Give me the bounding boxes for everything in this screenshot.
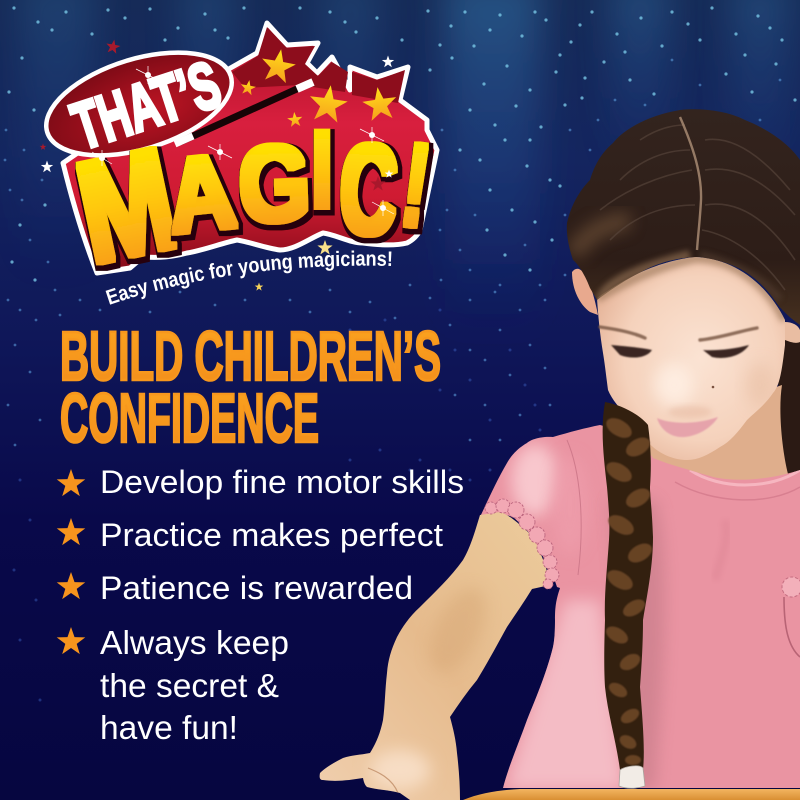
arm and hand — [320, 512, 550, 800]
bullet star 3 — [57, 572, 85, 599]
tagline text: Easy magic for young magicians! — [106, 250, 392, 305]
heading: CONFIDENCE — [60, 379, 319, 457]
neck — [650, 385, 788, 482]
bullet star 4 — [57, 627, 85, 654]
bullet text 4: the secret & — [100, 667, 279, 704]
face — [597, 257, 785, 460]
logo: MAGIC! lettering: G — [237, 123, 312, 246]
shirt — [480, 425, 800, 790]
photo: girl looking down — [320, 109, 800, 800]
bullet text 4 — [100, 624, 289, 746]
nose and cheek shading — [597, 258, 785, 418]
hair parting — [680, 117, 701, 250]
heading — [60, 317, 441, 457]
shirt pocket — [784, 597, 800, 657]
bullet list — [57, 464, 464, 746]
logo: MAGIC! lettering: C — [337, 117, 400, 263]
logo: That's Magic! — [34, 23, 437, 305]
logo: magic wand — [175, 82, 313, 144]
heading: BUILD CHILDREN’S — [60, 317, 441, 395]
eyebrows — [600, 327, 757, 340]
logo: dark red oval — [34, 33, 244, 175]
bullet text 2: Practice makes perfect — [100, 517, 443, 553]
pocket flower — [782, 577, 800, 597]
mole — [712, 386, 714, 388]
logo: MAGIC! lettering: A — [162, 132, 240, 255]
logo: gold stars — [239, 46, 399, 127]
bullet text 3: Patience is rewarded — [100, 570, 413, 606]
left ear — [572, 269, 598, 315]
bullet text 4: have fun! — [100, 709, 238, 746]
eyes — [611, 345, 749, 358]
facial features — [597, 258, 785, 437]
bullet text 1: Develop fine motor skills — [100, 464, 464, 500]
logo: small loose stars — [40, 38, 394, 291]
right ear — [785, 322, 800, 343]
logo: THAT'S lettering: THAT’S — [63, 47, 229, 163]
table edge — [463, 789, 800, 800]
bullet star 2 — [57, 518, 85, 545]
mouth — [657, 417, 718, 437]
left braid — [603, 402, 655, 770]
logo: MAGIC! lettering: I — [312, 108, 332, 231]
logo: red star-burst backing — [63, 23, 437, 273]
logo: MAGIC! lettering: ! — [397, 119, 435, 252]
logo: MAGIC! lettering — [65, 108, 435, 295]
hair — [567, 109, 800, 325]
right braid — [778, 335, 800, 490]
logo: upper dark star shapes — [232, 27, 405, 103]
bullet text 4: Always keep — [100, 624, 289, 661]
logo: MAGIC! lettering: M — [65, 118, 188, 295]
sleeve flower trim — [485, 499, 559, 589]
bullet star 1 — [57, 469, 85, 496]
logo: sparkles — [92, 66, 394, 216]
hair tie — [619, 766, 645, 788]
logo: tagline curve — [109, 266, 392, 305]
